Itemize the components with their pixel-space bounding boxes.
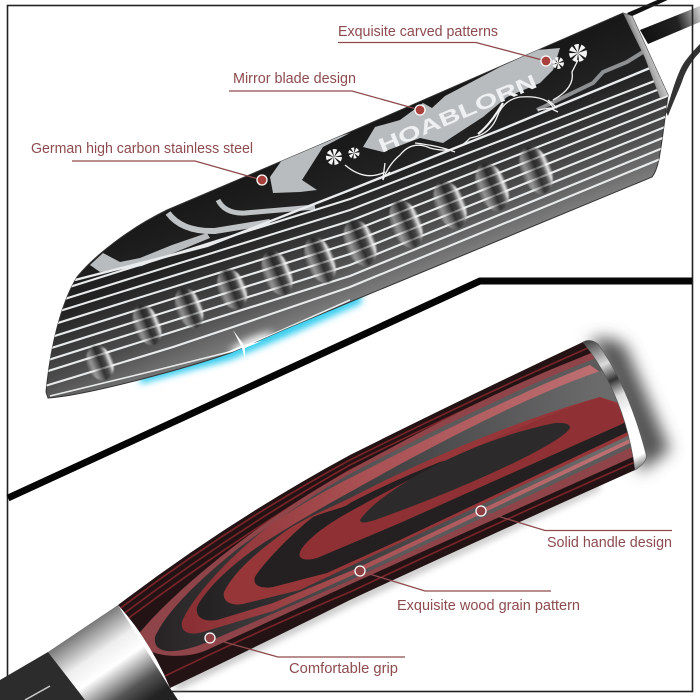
wooden handle [118,342,635,688]
blade [45,13,670,398]
wood edge stripes [118,347,635,676]
bolster and rear blade [0,605,178,700]
white flare on blade edge [228,329,276,357]
callout: Exquisite wood grain pattern [355,566,580,614]
callout: Solid handle design [476,506,672,551]
callout: Comfortable grip: Comfortable grip [289,660,398,677]
blue glow along blade edge [140,292,362,384]
callout: Comfortable grip [205,633,405,677]
knife tang at top right [627,0,700,116]
heel band [623,13,668,98]
wood grain layers [138,350,640,656]
icon: sparkle on blade edge [220,330,262,359]
diagonal divider [8,281,692,498]
callout: Mirror blade design: Mirror blade design [233,70,356,87]
damascus patterns [90,48,560,272]
handle shadows [175,338,670,692]
blade hollows [81,141,559,385]
callout: German high carbon stainless steel [31,140,267,185]
icons: engraved flowers [330,48,582,161]
callout: Exquisite carved patterns [338,23,551,66]
stripes [45,68,670,396]
callout: German high carbon stainless steel: German high carbon stainless steel [31,140,253,157]
callout: Exquisite carved patterns: Exquisite carved patterns [338,23,498,40]
ferrule [583,340,646,470]
callout: Exquisite wood grain pattern: Exquisite wood grain pattern [397,597,580,614]
brand logo: HOABLORN [375,71,540,158]
callout: Solid handle design: Solid handle design [547,534,672,551]
callout: Mirror blade design [229,70,425,115]
icon: logo vine [345,60,578,180]
